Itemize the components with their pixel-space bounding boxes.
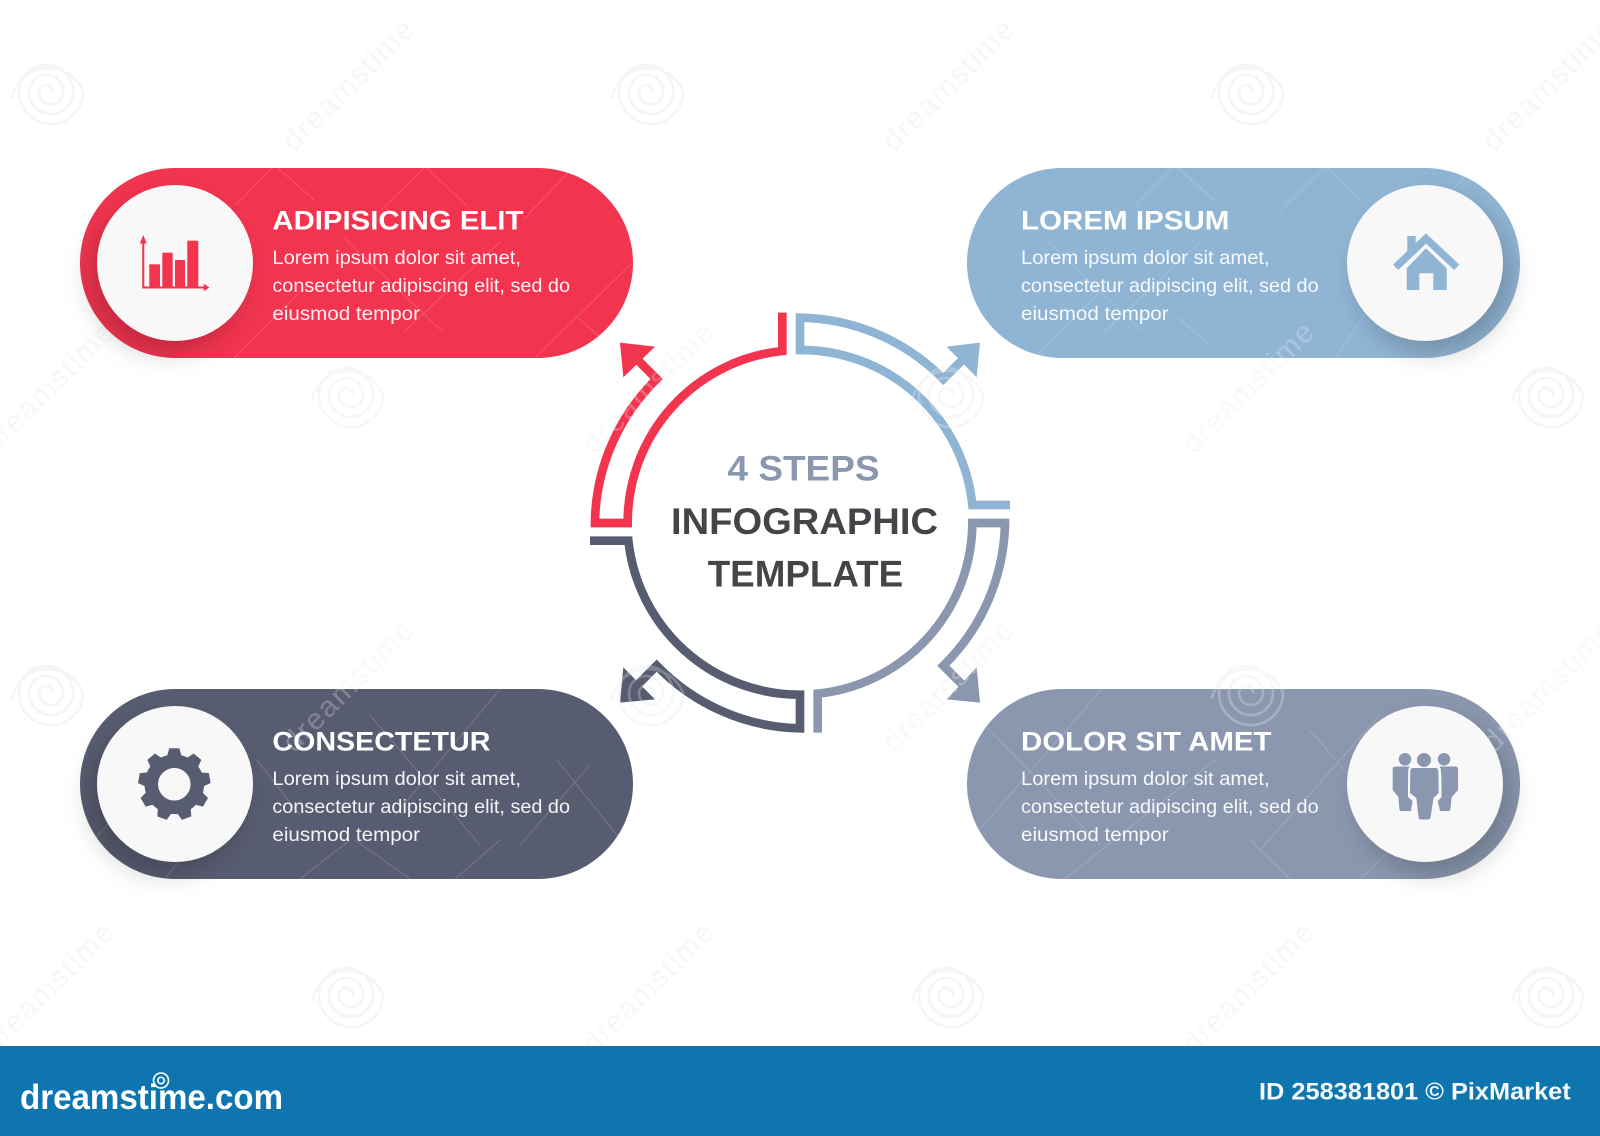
- watermark: grey background spirals and wordmarks: dreamstime: [276, 13, 421, 158]
- watermark: translucent white overlay: dreamstime: [576, 316, 721, 461]
- watermark: grey background spirals and wordmarks: dreamstime: [276, 614, 421, 759]
- icon: bar chart: [140, 235, 209, 291]
- heading: adipisicing elit: ADIPISICING ELIT: [272, 206, 524, 236]
- watermark: grey background spirals and wordmarks: dreamstime: [1176, 916, 1321, 1061]
- text block: dolor sit amet body: eiusmod tempor: [1021, 825, 1169, 846]
- footer bar: [0, 1046, 1600, 1136]
- title: 4 steps infographic template: TEMPLATE: [708, 554, 903, 595]
- arrow: red step: [595, 313, 782, 523]
- heading: dolor sit amet: DOLOR SIT AMET: [1021, 726, 1272, 756]
- watermark: grey background spirals and wordmarks: dreamstime: [1176, 316, 1321, 461]
- footer credit: image id: ID 258381801 © PixMarket: [1259, 1078, 1571, 1105]
- title: 4 steps infographic template: [671, 450, 938, 595]
- text block: consectetur body: eiusmod tempor: [272, 825, 421, 846]
- text block: consectetur body: consectetur adipiscing elit, sed do: [272, 797, 570, 818]
- panel: consectetur: [80, 689, 633, 879]
- icon: house: [1396, 236, 1457, 290]
- arrow: dark step: [590, 541, 800, 728]
- panel: adipisicing elit: [80, 168, 633, 358]
- text block: consectetur body: Lorem ipsum dolor sit amet,: [272, 769, 521, 790]
- text block: dolor sit amet body: [1021, 769, 1319, 846]
- text block: consectetur body: [272, 769, 570, 846]
- heading: lorem ipsum: LOREM IPSUM: [1021, 206, 1229, 236]
- watermark: grey background spirals and wordmarks: dreamstime: [876, 614, 1021, 759]
- text block: lorem ipsum body: Lorem ipsum dolor sit amet,: [1021, 248, 1270, 269]
- text block: dolor sit amet body: Lorem ipsum dolor sit amet,: [1021, 769, 1270, 790]
- panel: lorem ipsum: [967, 168, 1520, 358]
- icon: people: [1393, 753, 1458, 820]
- watermark: translucent white overlay: dreamstime: [1176, 316, 1321, 461]
- watermark: grey background spirals and wordmarks: dreamstime: [576, 316, 721, 461]
- arrow: slate step: [818, 523, 1005, 733]
- text block: adipisicing elit body: consectetur adipiscing elit, sed do: [272, 276, 570, 297]
- watermark: translucent white overlay: dreamstime: [876, 614, 1021, 759]
- title: 4 steps infographic template: 4 STEPS: [728, 450, 880, 489]
- watermark: translucent white overlay: [276, 316, 1600, 759]
- text block: adipisicing elit body: Lorem ipsum dolor sit amet,: [272, 248, 521, 269]
- text block: lorem ipsum body: eiusmod tempor: [1021, 304, 1169, 325]
- text block: lorem ipsum body: consectetur adipiscing elit, sed do: [1021, 276, 1319, 297]
- arrow: blue step: [800, 318, 1010, 505]
- footer logo: dreamstime.com: dreamstime.com: [20, 1078, 283, 1117]
- watermark: grey background spirals and wordmarks: dreamstime: [876, 13, 1021, 158]
- icon: gear: [138, 748, 211, 821]
- title: 4 steps infographic template: INFOGRAPHIC: [671, 501, 938, 542]
- panel: dolor sit amet: [967, 689, 1520, 879]
- text block: dolor sit amet body: consectetur adipiscing elit, sed do: [1021, 797, 1319, 818]
- text block: adipisicing elit body: [272, 248, 570, 325]
- watermark: translucent white overlay: dreamstime: [276, 614, 421, 759]
- heading: consectetur: CONSECTETUR: [272, 726, 490, 756]
- watermark: grey background spirals and wordmarks: dreamstime: [576, 916, 721, 1061]
- text block: lorem ipsum body: [1021, 248, 1319, 325]
- circular arrows diagram: [590, 313, 1010, 733]
- text block: adipisicing elit body: eiusmod tempor: [272, 304, 421, 325]
